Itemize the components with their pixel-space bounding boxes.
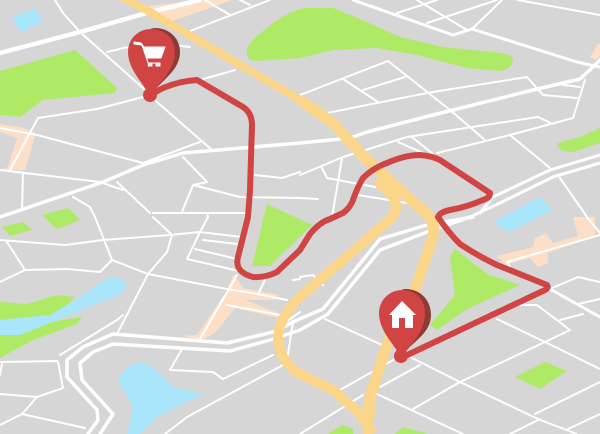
highway — [122, 0, 434, 434]
minor peach roads — [0, 0, 600, 340]
pin: home — [379, 289, 431, 363]
route line — [150, 80, 548, 357]
pin: shopping cart — [128, 28, 180, 102]
icon: cart — [134, 42, 165, 66]
icon: house — [389, 301, 416, 328]
